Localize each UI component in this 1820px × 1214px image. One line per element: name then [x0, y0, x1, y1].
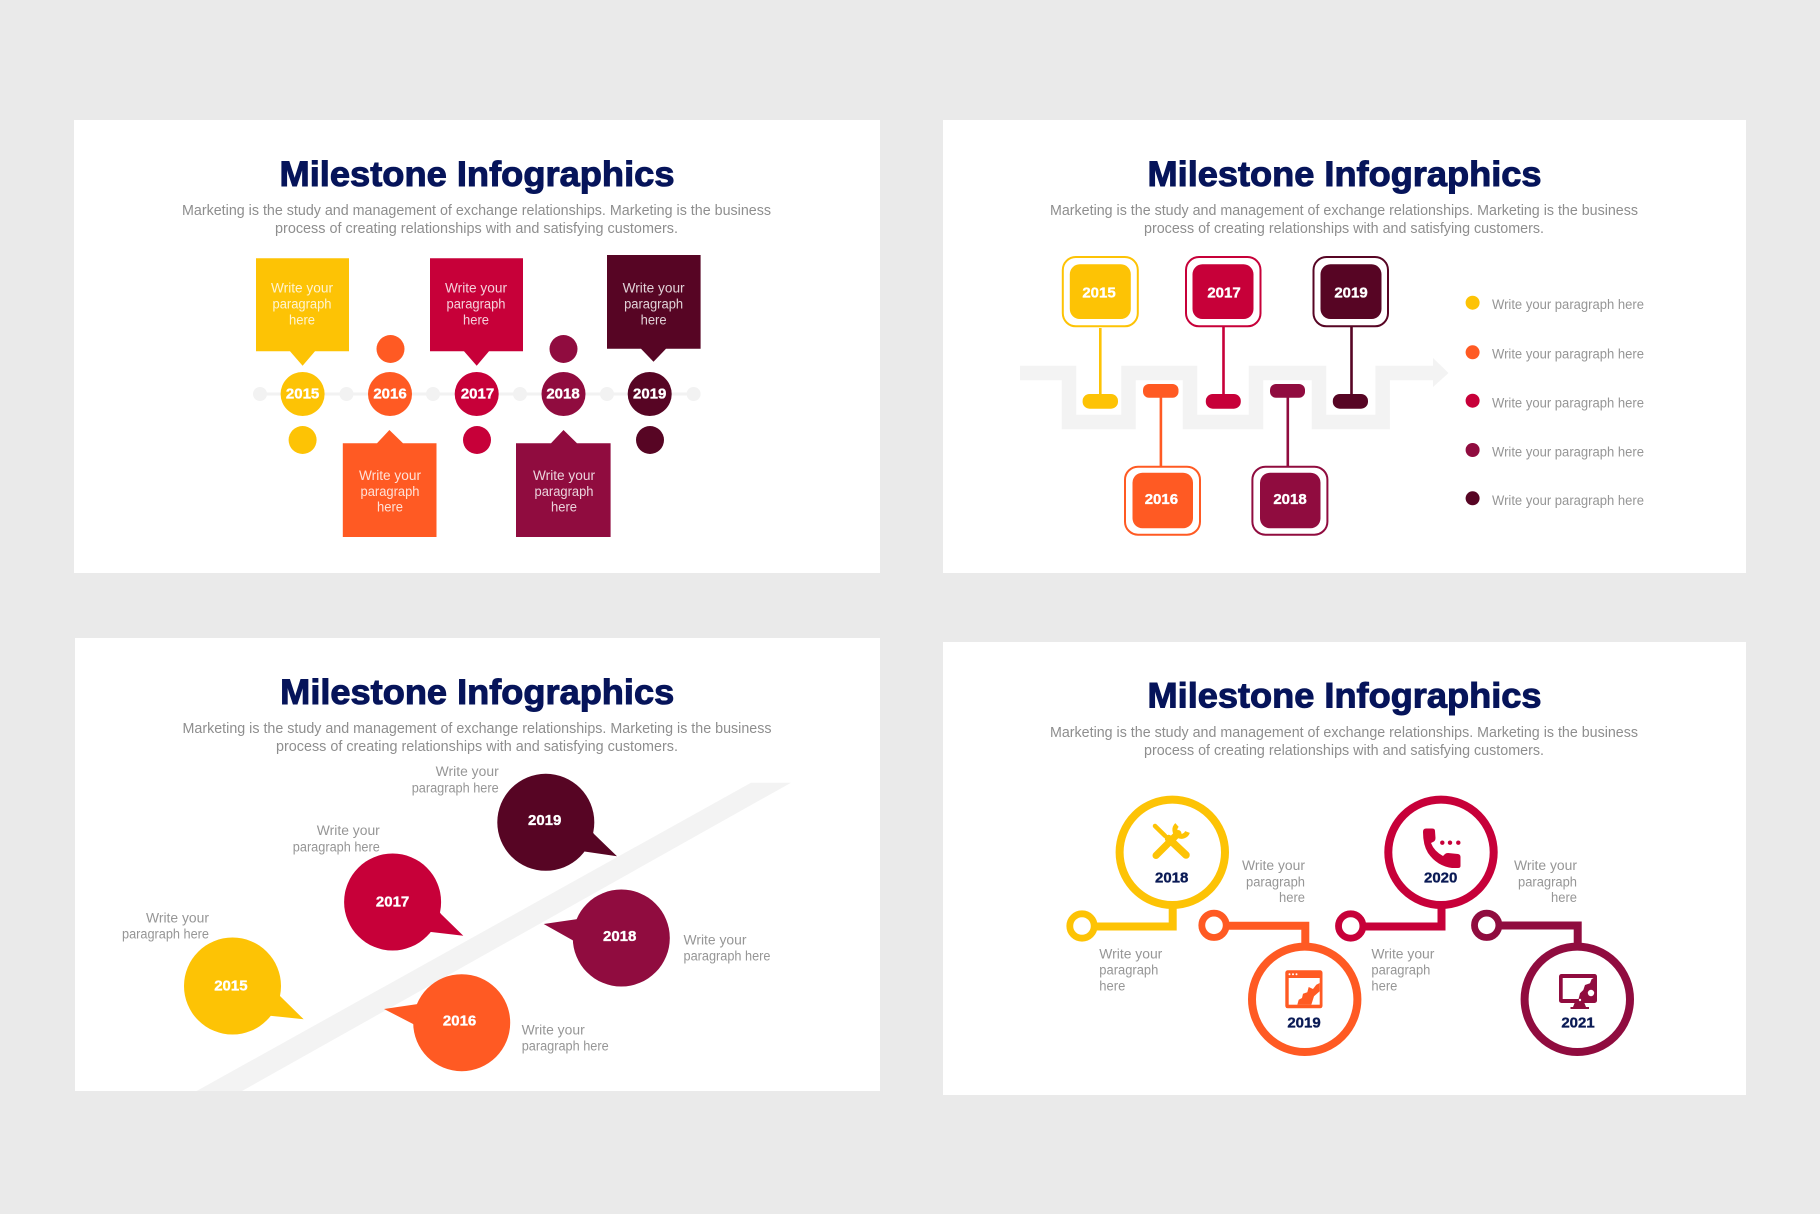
milestone 2018: 2018 — [546, 386, 580, 403]
bubble caption 2019: paragraph here — [412, 780, 499, 795]
milestone badge 2019 — [1314, 257, 1388, 409]
ring milestone 2018 — [1070, 800, 1225, 938]
subtitle — [182, 720, 772, 755]
speech bubble 2019: 2019 — [528, 812, 561, 829]
milestone 2019: paragraph — [624, 297, 683, 312]
bubble caption 2018 — [684, 932, 770, 964]
milestone 2018: paragraph — [534, 484, 594, 499]
ring text 2019 — [1242, 858, 1306, 905]
speech bubble 2016: 2016 — [443, 1012, 476, 1029]
bubble caption 2018: Write your — [684, 932, 747, 947]
milestone badge 2018: 2018 — [1273, 491, 1307, 508]
ring text 2021: paragraph — [1518, 874, 1577, 889]
legend: Write your paragraph here — [1492, 444, 1644, 459]
bubble caption 2017: paragraph here — [293, 839, 380, 854]
bubble caption 2016: paragraph here — [522, 1038, 609, 1053]
milestone badge 2016 — [1125, 384, 1200, 535]
milestone 2015: paragraph — [272, 297, 332, 312]
milestone badge 2015: 2015 — [1082, 284, 1116, 302]
milestone 2016: 2016 — [373, 386, 407, 403]
milestone badge 2017 — [1186, 257, 1260, 409]
panel: milestone boxes on dotted timeline — [74, 120, 880, 573]
bubble caption 2017 — [293, 823, 380, 854]
milestone 2018 — [516, 335, 611, 537]
ring milestone 2021: 2021 — [1561, 1014, 1595, 1031]
speech bubble 2017 — [344, 854, 463, 950]
subtitle: process of creating relationships with and satisfying customers. — [275, 220, 678, 237]
speech bubble 2015: 2015 — [214, 978, 248, 994]
ring text 2020: paragraph — [1371, 963, 1430, 978]
milestone 2017: Write your — [445, 281, 508, 296]
subtitle: Marketing is the study and management of exchange relationships. Marketing is the business — [182, 720, 772, 737]
bubble caption 2019 — [412, 764, 499, 795]
panel: speech bubbles along diagonal — [75, 638, 880, 1091]
bubble caption 2015: Write your — [146, 910, 210, 925]
milestone 2015: Write your — [271, 281, 334, 296]
legend: Write your paragraph here — [1492, 395, 1644, 410]
ring milestone 2021 — [1474, 913, 1630, 1052]
arrow: winding path — [1020, 358, 1448, 422]
subtitle: Marketing is the study and management of exchange relationships. Marketing is the business — [1050, 202, 1638, 219]
bubble caption 2019: Write your — [436, 764, 499, 779]
milestone 2016: Write your — [359, 468, 422, 483]
ring text 2018 — [1099, 946, 1163, 993]
subtitle — [182, 202, 771, 237]
milestone 2015: here — [289, 312, 315, 327]
milestone badge 2015 — [1063, 257, 1138, 409]
title: Milestone Infographics — [1148, 155, 1542, 194]
milestone 2017 — [430, 258, 523, 454]
milestone 2017: paragraph — [446, 297, 506, 312]
ring text 2018: Write your — [1099, 946, 1163, 961]
ring text 2021: here — [1551, 890, 1577, 905]
ring text 2018: here — [1099, 978, 1125, 993]
diagonal band — [197, 783, 791, 1091]
panel: connected ring milestones with icons — [943, 642, 1746, 1095]
ring text 2019: paragraph — [1246, 874, 1305, 889]
timeline track — [253, 387, 701, 401]
subtitle — [1050, 724, 1638, 759]
milestone 2019: here — [641, 312, 667, 327]
milestone badge 2017: 2017 — [1207, 284, 1241, 302]
ring text 2020: Write your — [1371, 946, 1435, 961]
ring text 2021: Write your — [1514, 858, 1578, 873]
speech bubble 2018 — [544, 890, 670, 986]
milestone 2019 — [607, 255, 701, 454]
speech bubble 2016 — [384, 974, 510, 1071]
ring text 2018: paragraph — [1099, 963, 1158, 978]
ring milestone 2020: 2020 — [1424, 869, 1457, 886]
icon: monitor with gear — [1559, 974, 1597, 1009]
milestone 2018: here — [551, 500, 577, 515]
legend: Write your paragraph here — [1492, 493, 1644, 508]
bubble caption 2017: Write your — [317, 823, 380, 838]
milestone 2016 — [343, 335, 436, 537]
milestone 2015 — [256, 258, 349, 454]
milestone badge 2016: 2016 — [1145, 491, 1178, 508]
ring milestone 2019: 2019 — [1287, 1014, 1321, 1031]
ring text 2019: Write your — [1242, 858, 1306, 873]
ring milestone 2018: 2018 — [1155, 869, 1188, 886]
bubble caption 2015 — [122, 910, 210, 941]
milestone 2016: here — [377, 500, 403, 515]
ring milestone 2020 — [1338, 800, 1494, 938]
icon: phone — [1423, 828, 1461, 868]
legend — [1466, 296, 1644, 508]
legend: Write your paragraph here — [1492, 347, 1644, 362]
subtitle — [1050, 202, 1638, 237]
milestone 2016: paragraph — [360, 484, 420, 499]
ring milestone 2019 — [1202, 913, 1357, 1052]
icon: tools — [1155, 825, 1188, 856]
legend: Write your paragraph here — [1492, 297, 1644, 312]
speech bubble 2015 — [184, 938, 304, 1034]
ring text 2019: here — [1279, 890, 1305, 905]
milestone badge 2018 — [1252, 384, 1327, 535]
title: Milestone Infographics — [280, 155, 674, 194]
subtitle: process of creating relationships with and satisfying customers. — [276, 738, 678, 755]
ring text 2020 — [1371, 946, 1435, 993]
speech bubble 2018: 2018 — [603, 928, 636, 945]
bubble caption 2018: paragraph here — [684, 949, 770, 964]
milestone 2018: Write your — [533, 468, 596, 483]
bubble caption 2016 — [522, 1022, 609, 1053]
subtitle: process of creating relationships with and satisfying customers. — [1144, 742, 1544, 759]
milestone 2015: 2015 — [286, 386, 319, 403]
ring text 2020: here — [1371, 978, 1397, 993]
bubble caption 2015: paragraph here — [122, 926, 209, 941]
speech bubble 2019 — [497, 774, 617, 871]
milestone badge 2019: 2019 — [1334, 284, 1368, 302]
milestone 2019: 2019 — [633, 386, 666, 403]
title: Milestone Infographics — [280, 673, 674, 712]
ring text 2021 — [1514, 858, 1578, 905]
subtitle: Marketing is the study and management of exchange relationships. Marketing is the business — [182, 202, 771, 219]
subtitle: process of creating relationships with and satisfying customers. — [1144, 220, 1544, 237]
milestone 2017: here — [463, 312, 489, 327]
title: Milestone Infographics — [1148, 677, 1542, 716]
subtitle: Marketing is the study and management of exchange relationships. Marketing is the business — [1050, 724, 1638, 741]
milestone 2019: Write your — [623, 281, 685, 296]
icon: browser window with gear — [1285, 970, 1322, 1008]
milestone 2017: 2017 — [461, 386, 494, 403]
panel: winding arrow with year badges — [943, 120, 1746, 573]
speech bubble 2017: 2017 — [376, 893, 409, 910]
bubble caption 2016: Write your — [522, 1022, 585, 1037]
